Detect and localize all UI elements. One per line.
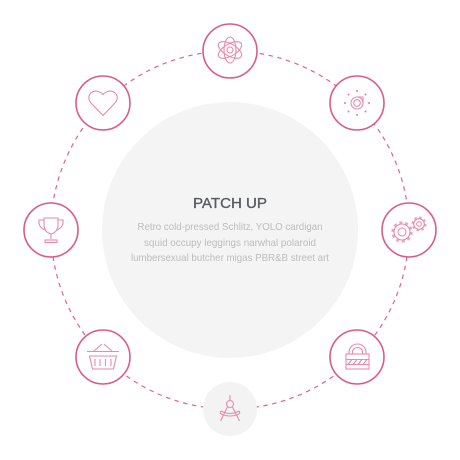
- heading: PATCH UP: [193, 196, 267, 212]
- node: heart: [76, 76, 130, 130]
- node: padlock: [330, 330, 384, 384]
- icon: radial dots: [344, 90, 370, 116]
- dashed orbit ring: [51, 51, 409, 409]
- node: atom: [203, 24, 257, 78]
- body text: [131, 222, 329, 264]
- body text: lumbersexual butcher migas PBR&B street art: [131, 253, 329, 264]
- node: target dots: [330, 76, 384, 130]
- central panel: [102, 102, 358, 358]
- node: basket: [76, 330, 130, 384]
- icon: heart: [89, 91, 117, 116]
- icon: padlock: [346, 344, 369, 369]
- body text: Retro cold-pressed Schlitz, YOLO cardigan: [138, 222, 323, 233]
- node: compass (active): [203, 382, 257, 436]
- icon: drawing compass: [220, 395, 240, 421]
- node: trophy: [24, 203, 78, 257]
- icon: shopping basket: [87, 344, 119, 369]
- icon: atom: [216, 37, 244, 63]
- icon: gears: [392, 218, 426, 242]
- icon: trophy: [39, 218, 63, 242]
- body text: squid occupy leggings narwhal polaroid: [144, 238, 316, 249]
- node: gears: [382, 203, 436, 257]
